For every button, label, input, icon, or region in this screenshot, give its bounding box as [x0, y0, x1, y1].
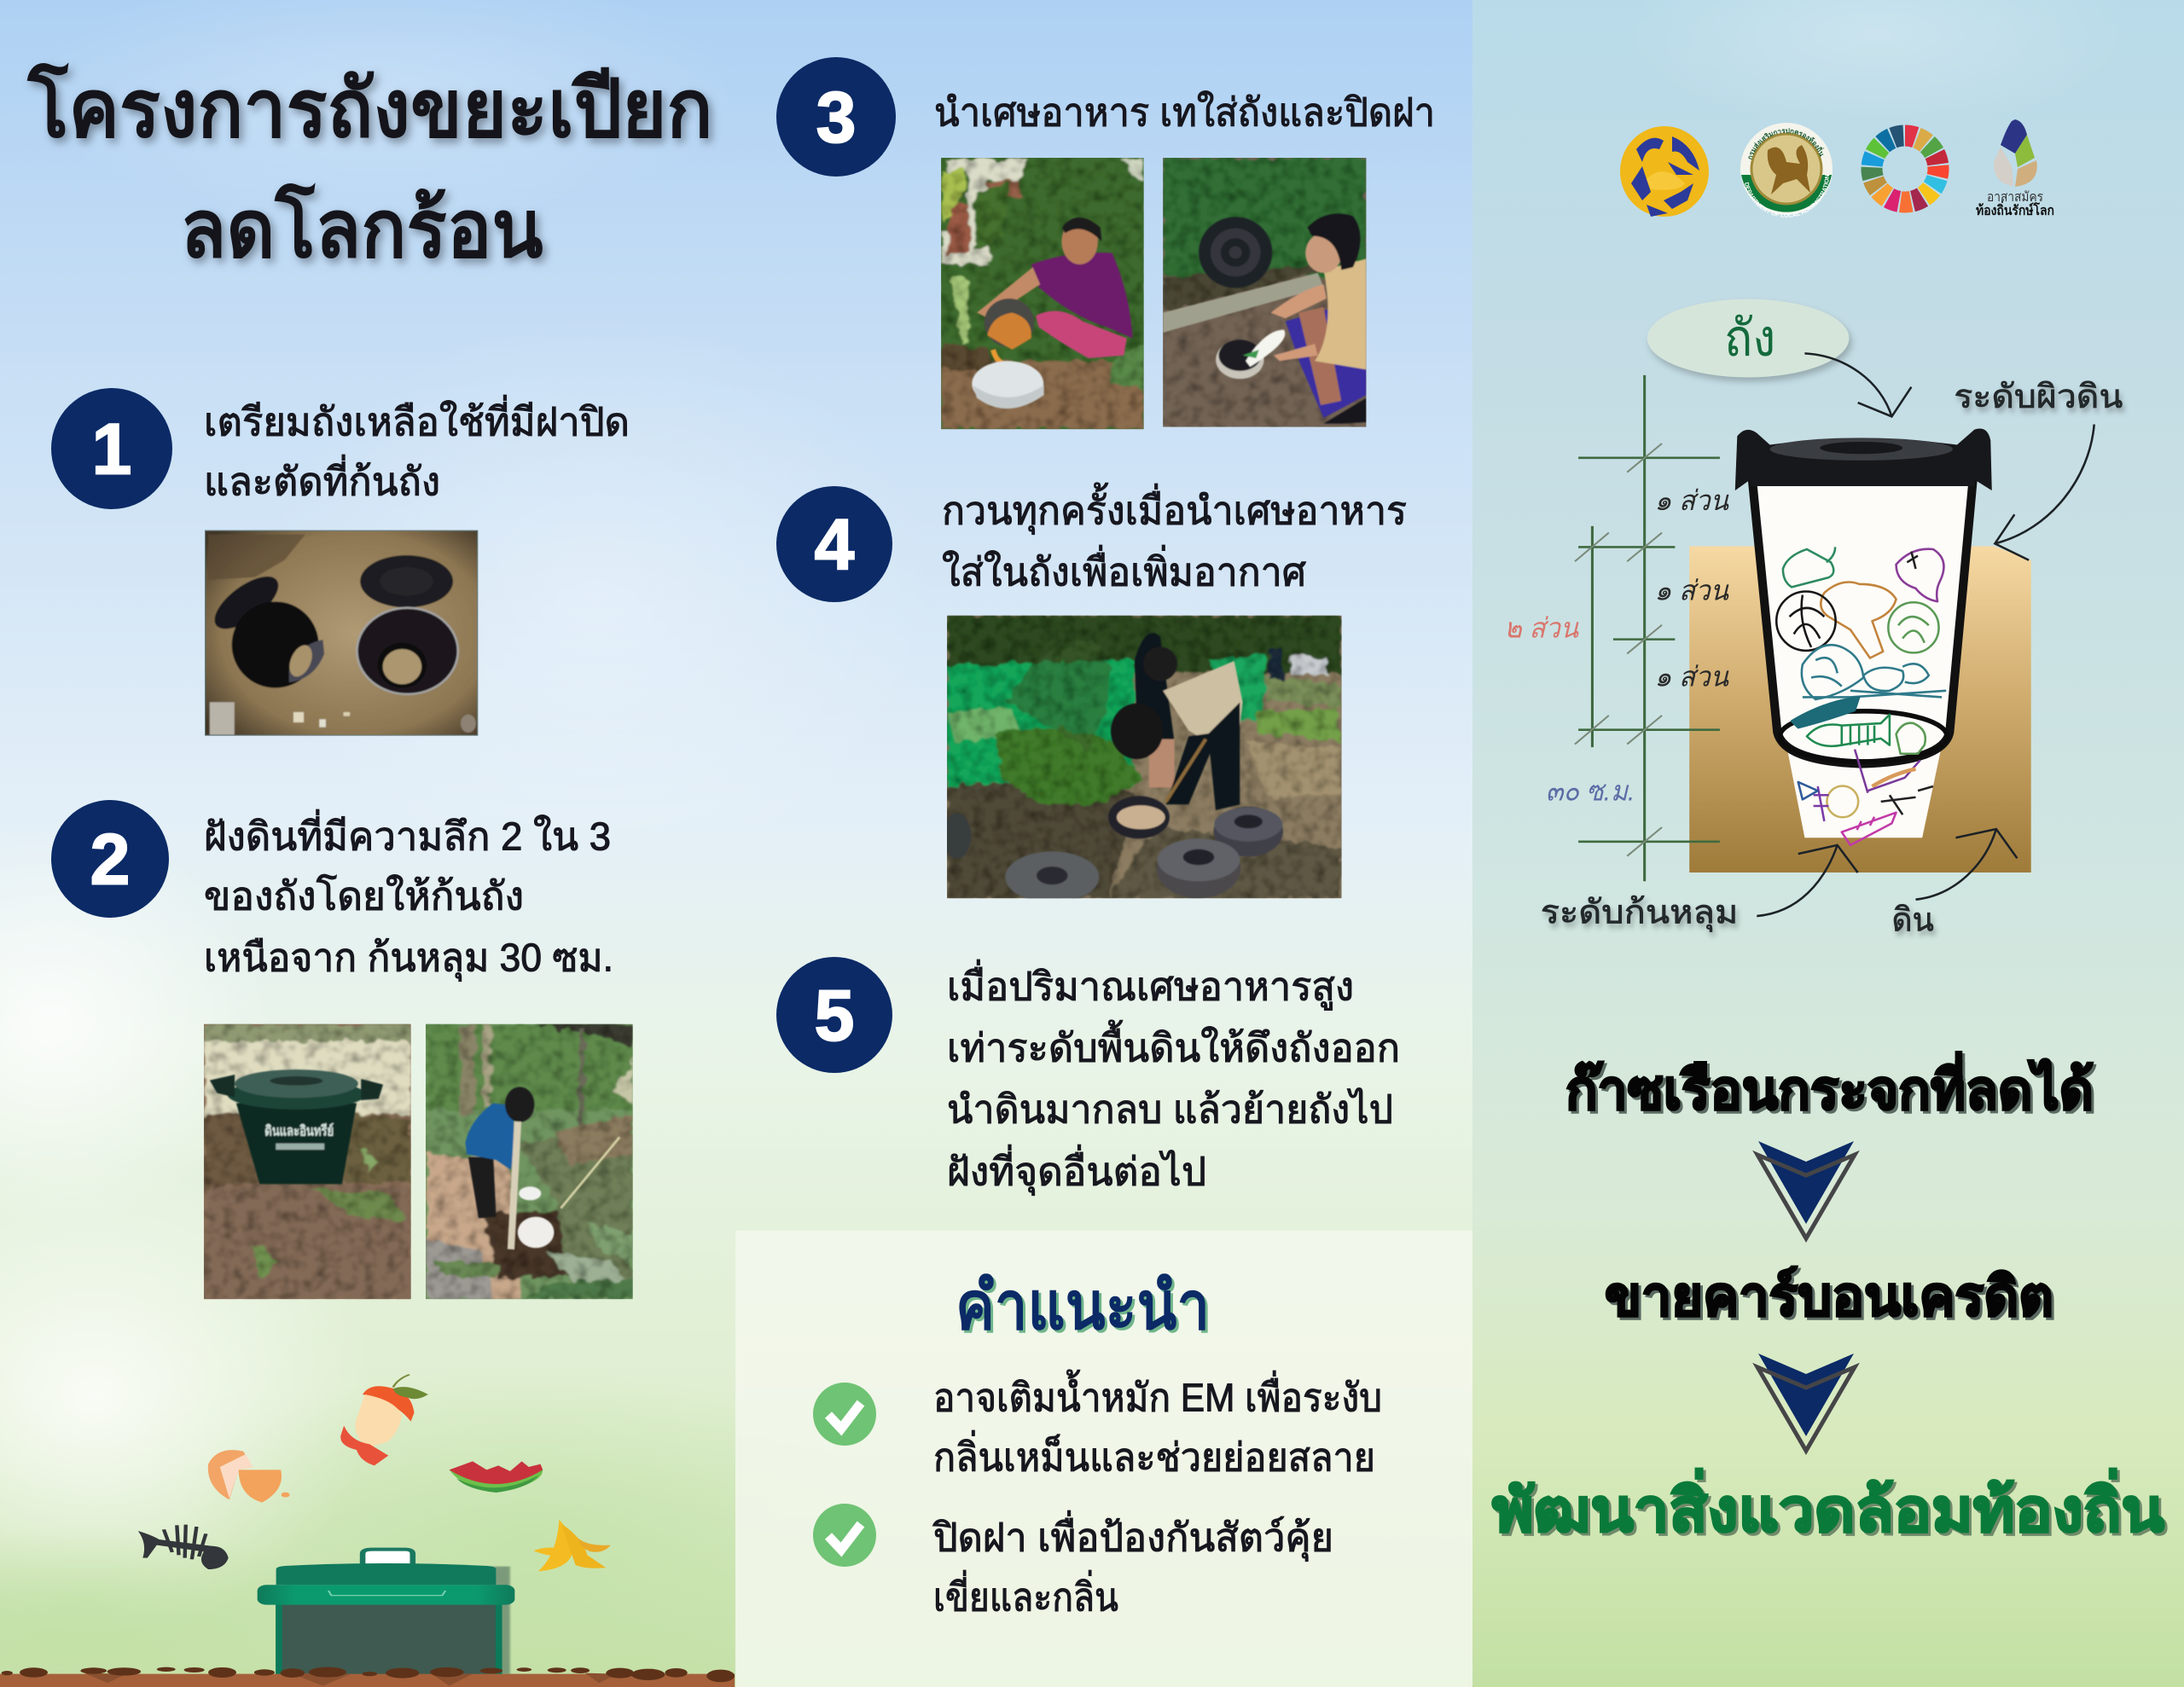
dimension labels: ๑ ส่วน: [1654, 484, 1730, 516]
advice text 1: อาจเติมน้ำหมัก EM เพื่อระงับ: [933, 1370, 1382, 1419]
step 2 text: เหนือจาก ก้นหลุม 30 ซม.: [204, 935, 613, 983]
icon: check 2: [813, 1504, 876, 1567]
labels: soil surface, pit bottom, soil: ระดับผิวดิน: [1954, 379, 2123, 415]
step 2 text: [204, 809, 613, 983]
step 3 text: นำเศษอาหาร เทใส่ถังและปิดฝา: [934, 90, 1435, 135]
step 2 photo: woman digging a hole: [426, 1024, 633, 1299]
step 4 photo: man stirring bin: [943, 616, 1342, 902]
step 2 number badge: 2: [90, 819, 130, 899]
title: [27, 64, 713, 274]
step 4 text: ใส่ในถังเพื่อเพิ่มอากาศ: [942, 544, 1306, 594]
icon: banana peel: [533, 1520, 611, 1571]
title: โครงการถังขยะเปียก: [27, 64, 713, 154]
step 2 text: ของถังโดยให้ก้นถัง: [204, 873, 524, 918]
step 5 text: นำดินมากลบ แล้วย้ายถังไป: [947, 1087, 1393, 1131]
dimension labels: [1504, 484, 1730, 806]
icon: watermelon rind: [450, 1461, 543, 1493]
panel: advice: [735, 1231, 1472, 1687]
dimension labels: ๓๐ ซ.ม.: [1546, 774, 1635, 806]
logo: provincial seal: [1620, 126, 1709, 217]
step 3 number badge: [776, 57, 896, 177]
logo: volunteer water drop: [1976, 119, 2054, 218]
bucket burial diagram: [1504, 299, 2123, 938]
step 2 photo: bucket half buried in soil: [204, 1024, 411, 1299]
dimension labels: ๑ ส่วน: [1654, 661, 1730, 693]
step 3 number badge: 3: [816, 77, 856, 157]
icon: fish skeleton: [138, 1525, 229, 1569]
logo: department of local administration: [1740, 123, 1833, 218]
labels: soil surface, pit bottom, soil: ดิน: [1891, 901, 1934, 938]
step 5 text: ฝังที่จุดอื่นต่อไป: [947, 1145, 1206, 1196]
lower pit contents: [1787, 750, 1941, 838]
advice heading: คำแนะนำ: [956, 1268, 1210, 1343]
icon: eggshell: [208, 1450, 290, 1503]
step 5 text: เมื่อปริมาณเศษอาหารสูง: [947, 959, 1354, 1010]
heading: greenhouse gases reduced: ก๊าซเรือนกระจกที่ลดได้: [1565, 1052, 2094, 1121]
step 4 number badge: [776, 486, 892, 602]
step 5 number badge: 5: [815, 976, 854, 1056]
bucket body: [1752, 478, 1973, 764]
bucket lid: [1735, 429, 1992, 490]
step 1 text: และตัดที่ก้นถัง: [204, 454, 440, 503]
advice text 2: เขี่ยและกลิ่น: [933, 1569, 1118, 1619]
step 1 number badge: 1: [92, 409, 131, 490]
advice text 2: ปิดฝา เพื่อป้องกันสัตว์คุ้ย: [932, 1510, 1333, 1562]
dimension labels: ๒ ส่วน: [1504, 612, 1580, 644]
callout arrows: [1757, 353, 2094, 916]
logo: sustainable development goals wheel: [1858, 122, 1952, 216]
step 1 number badge: [51, 388, 172, 509]
advice text 1: กลิ่นเหม็นและช่วยย่อยสลาย: [933, 1429, 1375, 1479]
step 2 photo: bucket half buried in soil: ดินและอินทรีย์: [264, 1122, 334, 1139]
icon: green compost bin: [258, 1550, 514, 1676]
advice text 1: [933, 1370, 1382, 1479]
step 1 text: [204, 394, 630, 503]
logo: volunteer water drop: อาสาสมัคร: [1987, 190, 2043, 205]
step 1 photo: two cut buckets on ground: [205, 530, 478, 736]
icon: check 1: [813, 1383, 876, 1446]
background: left and centre sky-to-grass gradient: [0, 0, 1472, 1687]
step 3 photo: woman pouring scraps: [941, 158, 1144, 429]
step 5 number badge: [776, 957, 892, 1073]
dimension lines: [1575, 375, 1720, 881]
step 2 text: ฝังดินที่มีความลึก 2 ใน 3: [204, 809, 611, 858]
arrow down 1: [1757, 1141, 1855, 1238]
vegetable line art: [1776, 547, 1946, 845]
dimension labels: ๑ ส่วน: [1654, 575, 1730, 606]
heading: develop local environment: พัฒนาสิ่งแวดล้อมท้องถิ่น: [1492, 1468, 2164, 1544]
soil block: [1689, 546, 2031, 872]
step 2 number badge: [51, 800, 169, 918]
step 5 text: [947, 959, 1400, 1196]
title: ลดโลกร้อน: [181, 184, 543, 274]
logo: department of local administration: กรมส่งเสริมการปกครองท้องถิ่น: [1748, 128, 1824, 159]
background: right column gradient: [1472, 0, 2184, 1687]
step 4 number badge: 4: [815, 505, 855, 585]
step 3 photo: woman scraping plate into bin: [1163, 158, 1366, 427]
arrow down 2: [1757, 1354, 1855, 1451]
oval label: bucket: ถัง: [1724, 310, 1775, 367]
bucket base ring: [1780, 711, 1947, 762]
labels: soil surface, pit bottom, soil: ระดับก้นหลุม: [1541, 895, 1738, 933]
step 1 text: เตรียมถังเหลือใช้ที่มีฝาปิด: [204, 394, 630, 443]
oval label: bucket: [1647, 299, 1849, 377]
logos row: [1620, 119, 2054, 218]
advice text 2: [932, 1510, 1333, 1619]
step 4 text: กวนทุกครั้งเมื่อนำเศษอาหาร: [942, 483, 1407, 536]
logo: department of local administration: DEPARTMENT OF LOCAL ADMINISTRATION: [1745, 175, 1829, 218]
logo: volunteer water drop: ท้องถิ่นรักษ์โลก: [1976, 200, 2054, 218]
ground strip: [0, 1667, 735, 1687]
food waste and green bin illustration: [0, 1375, 735, 1687]
icon: apple core: [340, 1375, 428, 1465]
step 5 text: เท่าระดับพื้นดินให้ดึงถังออก: [947, 1020, 1400, 1070]
step 4 text: [942, 483, 1407, 594]
heading: sell carbon credits: ขายคาร์บอนเครดิต: [1605, 1266, 2053, 1327]
labels: soil surface, pit bottom, soil: [1541, 379, 2123, 938]
